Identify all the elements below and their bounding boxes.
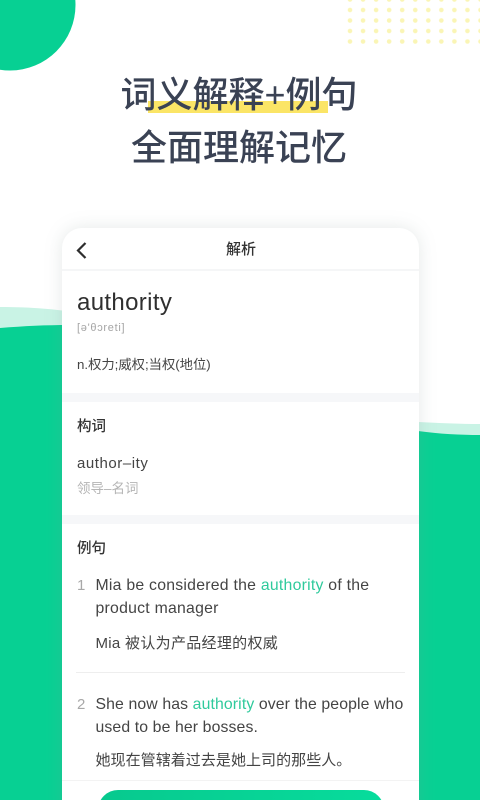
example 2 sentence bbox=[96, 696, 403, 736]
section gap bbox=[62, 515, 418, 524]
heading: word formation: 构词 bbox=[77, 419, 106, 435]
example 2 number: 2 bbox=[77, 696, 85, 713]
header title: 解析 bbox=[226, 241, 256, 258]
word: authority bbox=[77, 289, 172, 316]
example 2 translation: 她现在管辖着过去是她上司的那些人。 bbox=[96, 752, 351, 769]
light wave bbox=[0, 307, 480, 800]
title: 全面理解记忆 bbox=[131, 127, 347, 168]
header divider bbox=[62, 269, 418, 271]
icon: back arrow bbox=[76, 242, 86, 259]
highlight under title bbox=[148, 101, 328, 113]
example 1 sentence: product manager bbox=[96, 600, 219, 617]
definition: n.权力;威权;当权(地位) bbox=[77, 357, 211, 372]
example 1 sentence: Mia be considered the authority of the bbox=[96, 577, 369, 594]
title bbox=[120, 74, 358, 168]
panel: phone card bbox=[62, 228, 418, 800]
example divider bbox=[76, 672, 405, 673]
dot grid bbox=[345, 0, 480, 46]
title: 词义解释+例句 bbox=[120, 74, 358, 115]
button bbox=[98, 790, 384, 800]
green wave bbox=[0, 325, 480, 800]
example 1 translation: Mia 被认为产品经理的权威 bbox=[96, 635, 278, 652]
word parts: author–ity bbox=[77, 455, 148, 472]
example 1 number: 1 bbox=[77, 577, 85, 594]
card shadow bbox=[62, 228, 419, 800]
phonetic: [ә'θɔreti] bbox=[77, 322, 125, 334]
section gap bbox=[62, 393, 418, 402]
example 1 sentence bbox=[96, 577, 369, 617]
bottom divider bbox=[62, 780, 418, 781]
example 2 sentence: She now has authority over the people who bbox=[96, 696, 403, 713]
green circle bbox=[0, 0, 76, 70]
heading: examples: 例句 bbox=[77, 541, 106, 557]
word parts meaning: 领导–名词 bbox=[77, 481, 139, 496]
example 2 sentence: used to be her bosses. bbox=[96, 719, 258, 736]
